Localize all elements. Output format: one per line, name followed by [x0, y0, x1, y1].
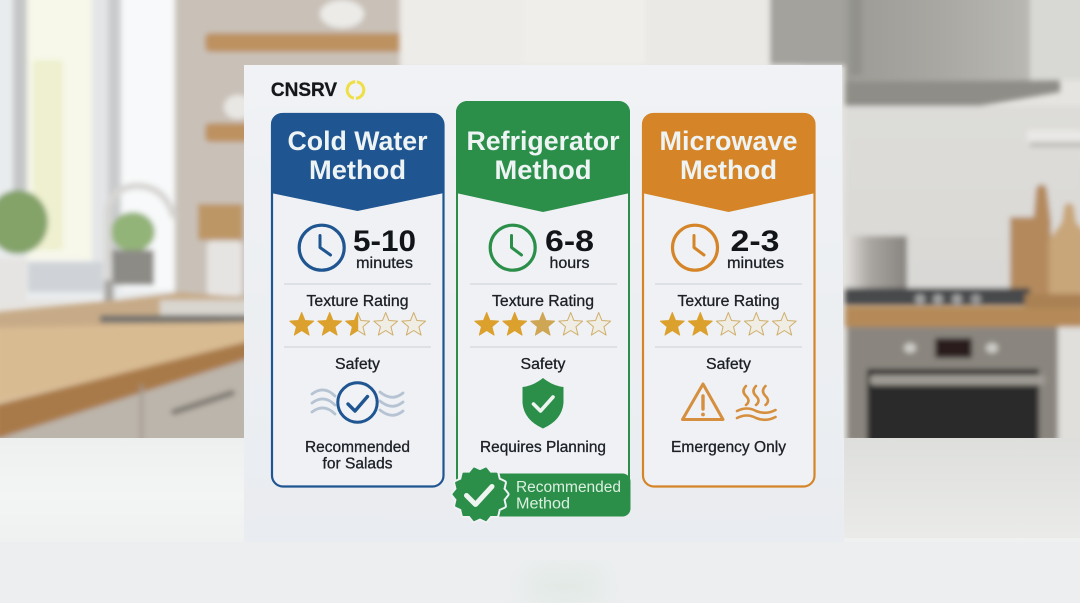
header: microwave: Method: [680, 155, 777, 185]
header: cold water: Method: [309, 155, 406, 185]
left wall: [170, 0, 410, 320]
header: microwave: Microwave: [660, 126, 798, 156]
rating stars: 2 of 5: [660, 312, 796, 335]
brand logo: CNSRV: CNSRV: [271, 80, 337, 101]
icon: check badge: [454, 468, 506, 520]
worktop surface: [0, 322, 250, 404]
rating stars: 3 of 5: [475, 312, 611, 335]
texture rating label: Texture Rating: [492, 293, 594, 310]
wood edge: [0, 341, 250, 440]
time: 5-10 minutes: 5-10: [353, 225, 416, 258]
safety label: Safety: [335, 356, 380, 373]
header: refrigerator: Method: [494, 155, 592, 185]
recommended method ribbon: [454, 468, 630, 520]
shelves: [205, 33, 405, 52]
safety label: Safety: [706, 356, 751, 373]
logo ring: [346, 80, 365, 100]
recommended method ribbon: Method: [516, 496, 570, 512]
verdict: recommended for salads: Recommended: [305, 439, 410, 456]
paper card: [244, 65, 844, 542]
texture rating label: Texture Rating: [306, 293, 408, 310]
safety label: Safety: [520, 356, 566, 373]
icon: heat waves: [737, 386, 776, 420]
icon: shield with check: [522, 378, 564, 428]
time: 2-3 minutes: 2-3: [730, 225, 780, 258]
icon: warning triangle: [682, 384, 723, 420]
sink ledge: [0, 292, 250, 332]
cutting boards: [1010, 217, 1038, 297]
icon: check with water waves: [312, 383, 403, 422]
time: 6-8 hours: [545, 225, 594, 272]
top centre cabinets: [400, 0, 525, 65]
plants: [0, 190, 48, 254]
time: 6-8 hours: hours: [550, 255, 590, 272]
foreground white counter: [0, 438, 1080, 603]
window: [0, 0, 175, 300]
time: 5-10 minutes: [353, 225, 416, 272]
verdict: emergency only: Emergency Only: [671, 439, 786, 456]
faucet: [108, 186, 174, 312]
header: cold water: Cold Water: [288, 126, 428, 156]
verdict: recommended for salads: for Salads: [322, 456, 393, 472]
header: cold water: [271, 113, 444, 211]
verdict: recommended for salads: [305, 439, 410, 472]
pot: [845, 236, 907, 288]
tile wall: [845, 106, 1080, 296]
hob: [845, 288, 1030, 305]
time: 5-10 minutes: minutes: [356, 255, 413, 272]
time: 2-3 minutes: [727, 225, 784, 272]
cabinets: [0, 358, 250, 445]
header: microwave: [642, 113, 816, 212]
icon: clock: [299, 225, 344, 270]
panel: refrigerator method: [454, 101, 630, 520]
panel: microwave method: [642, 113, 816, 486]
texture rating label: Texture Rating: [678, 293, 780, 310]
verdict: requires planning: Requires Planning: [480, 439, 606, 456]
icon: clock: [490, 225, 535, 270]
utensils and crock: [198, 204, 243, 240]
header: refrigerator: Refrigerator: [466, 126, 620, 156]
time: 6-8 hours: 6-8: [545, 225, 594, 258]
time: 2-3 minutes: minutes: [727, 255, 784, 272]
oven: [1058, 327, 1080, 442]
hood: [845, 0, 1030, 82]
rating stars: 2.5 of 5: [290, 312, 426, 335]
recommended method ribbon: Recommended: [516, 479, 621, 496]
wood counter: [845, 306, 1080, 327]
header: refrigerator: [456, 101, 630, 212]
icon: clock: [672, 225, 718, 270]
panel: cold water method: [271, 113, 444, 486]
